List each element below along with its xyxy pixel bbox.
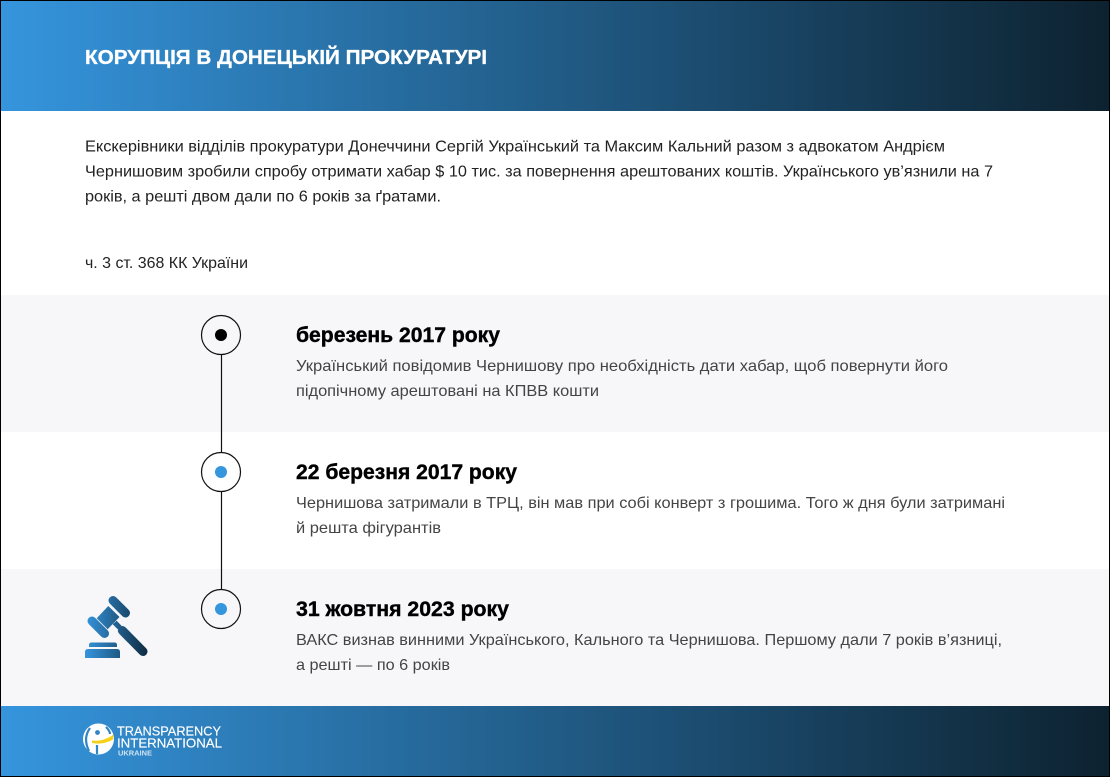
event 2 text: 22 березня 2017 року [296,461,517,484]
event 1 text: Український повідомив Чернишову про необхідність дати хабар, щоб повернути його [296,358,948,375]
event 3 text: ВАКС визнав винними Українського, Кального та Чернишова. Першому дали 7 років в’язниці, [296,632,1002,649]
timeline marker 3 [202,590,240,628]
event 1 text [296,324,948,400]
logo: Transparency International Ukraine [83,724,222,758]
timeline marker 2 [202,452,240,492]
intro paragraph [85,138,993,206]
timeline connector line [220,354,222,590]
panel: timeline event 3 background [1,569,1109,706]
intro paragraph: Екскерівники відділів прокуратури Донеччини Сергій Український та Максим Кальний разом з адвокатом Андрієм [85,138,945,156]
event 3 text: а решті — по 6 років [296,657,450,674]
title: КОРУПЦІЯ В ДОНЕЦЬКІЙ ПРОКУРАТУРІ [85,45,487,69]
event 2 text: Чернишова затримали в ТРЦ, він мав при собі конверт з грошима. Того ж дня були затримані [296,495,1005,512]
intro paragraph: років, а решті двом дали по 6 років за ґратами. [85,188,441,206]
event 3 text [296,598,1002,674]
event 2 text: й решта фігурантів [296,520,441,537]
header band [1,1,1109,111]
logo: Transparency International Ukraine: UKRAINE [118,748,152,758]
logo: Transparency International Ukraine: TRANSPARENCY [117,724,221,738]
icon: gavel [85,600,143,658]
event 3 text: 31 жовтня 2023 року [296,598,509,621]
panel: timeline event 1 background [1,295,1109,432]
event 1 text: березень 2017 року [296,324,500,347]
intro paragraph: Чернишовим зробили спробу отримати хабар $ 10 тис. за повернення арештованих коштів. Українського ув’язнили на 7 [85,164,993,180]
footer band [1,706,1109,776]
timeline marker 1 [202,316,240,354]
event 2 text [296,461,1005,537]
legal reference: ч. 3 ст. 368 КК України [85,255,248,272]
logo: Transparency International Ukraine: INTERNATIONAL [117,736,222,750]
event 1 text: підопічному арештовані на КПВВ кошти [296,383,599,400]
